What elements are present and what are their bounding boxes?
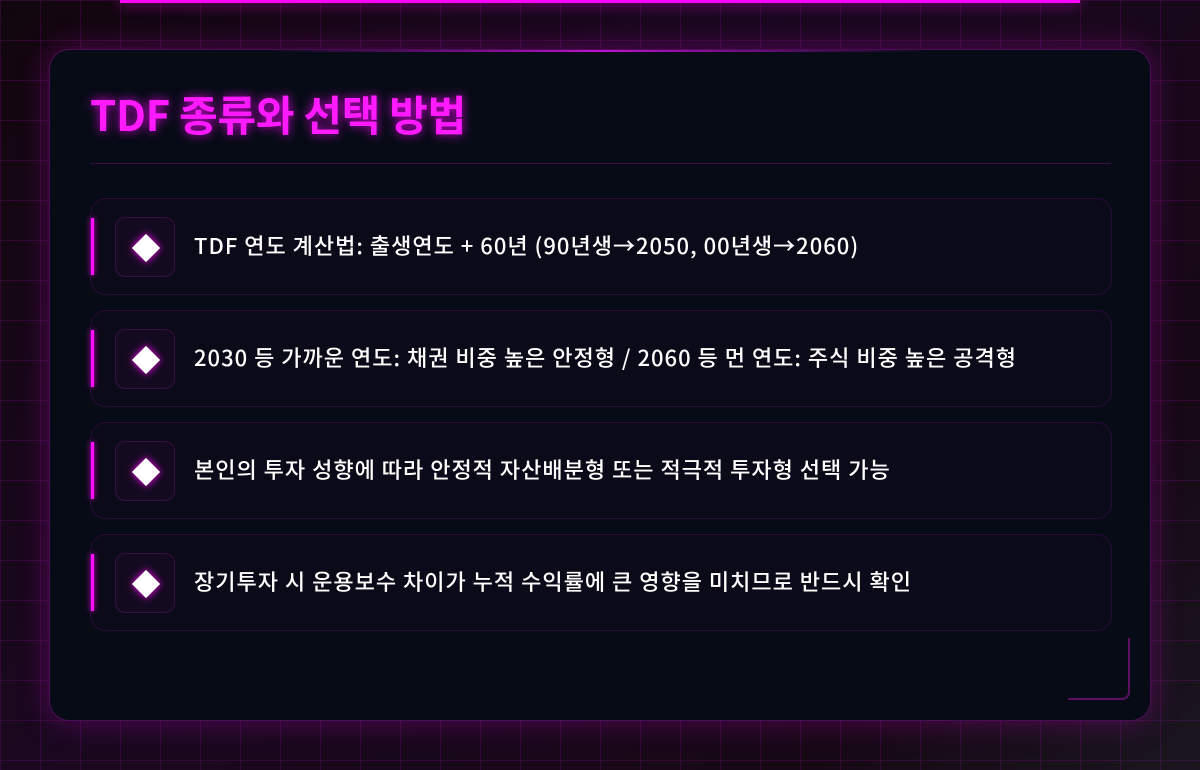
icon: diamond — [115, 441, 175, 501]
item 1: TDF 연도 계산법: 출생연도 + 60년 (90년생→2050, 00년생→2060) — [194, 229, 859, 261]
item 2: 2030 등 가까운 연도: 채권 비중 높은 안정형 / 2060 등 먼 연도: 주식 비중 높은 공격형 — [194, 341, 1017, 373]
item 3: 본인의 투자 성향에 따라 안정적 자산배분형 또는 적극적 투자형 선택 가능 — [194, 453, 891, 485]
title: TDF 종류와 선택 방법 — [90, 83, 466, 144]
icon: diamond — [115, 329, 175, 389]
item 1 — [90, 198, 1112, 295]
item 4: 장기투자 시 운용보수 차이가 누적 수익률에 큰 영향을 미치므로 반드시 확인 — [194, 565, 912, 597]
item 2 — [90, 310, 1112, 407]
item 4 — [90, 534, 1112, 631]
item 3 — [90, 422, 1112, 519]
icon: diamond — [115, 553, 175, 613]
icon: diamond — [115, 217, 175, 277]
